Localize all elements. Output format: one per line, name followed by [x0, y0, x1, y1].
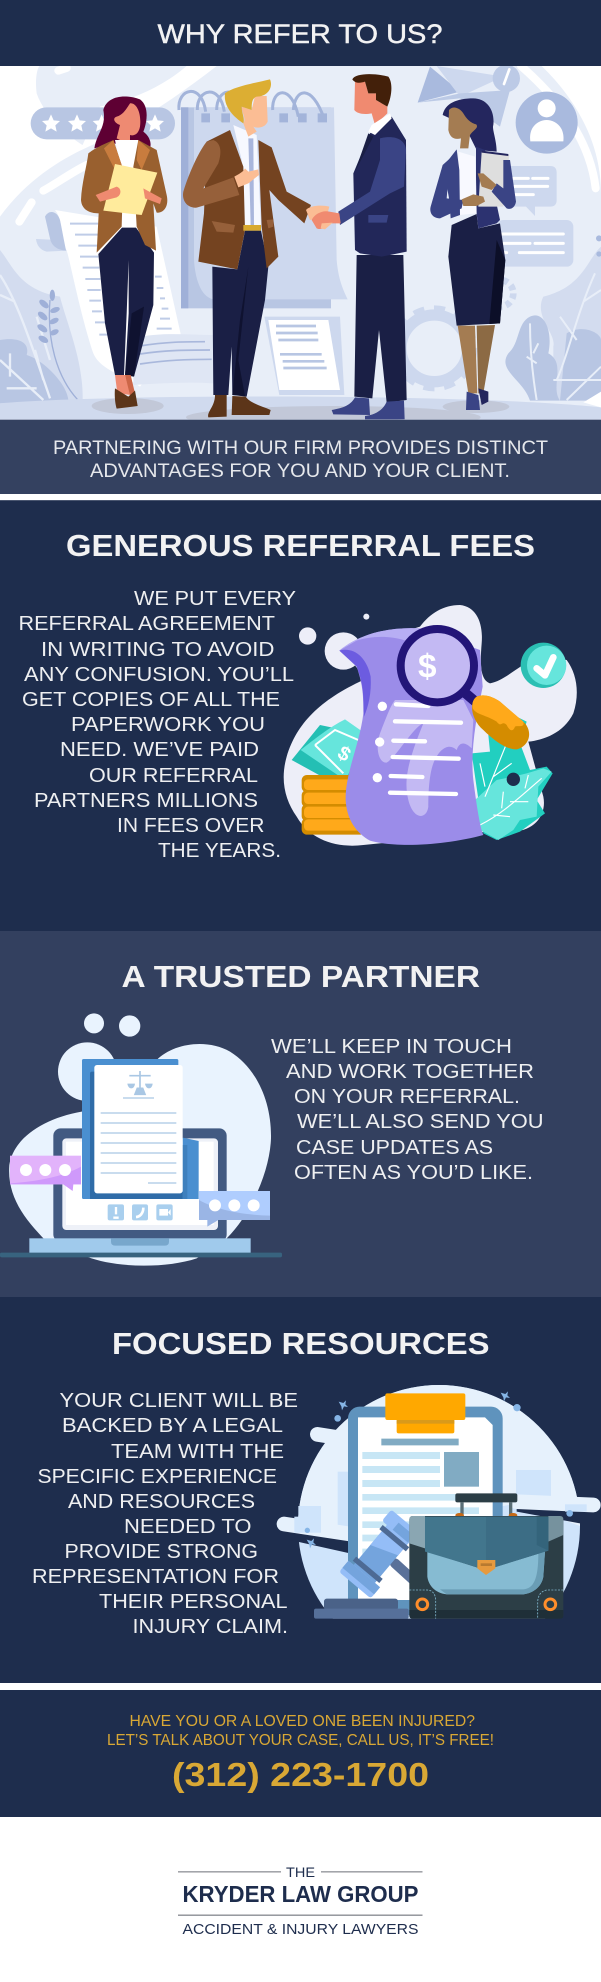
coin stack	[302, 775, 365, 835]
legal document	[82, 1059, 199, 1199]
body text	[32, 1389, 298, 1638]
body text: YOUR CLIENT WILL BE	[60, 1389, 298, 1412]
firm logo	[178, 1864, 422, 1938]
body text: ON YOUR REFERRAL.	[294, 1085, 520, 1108]
heading: GENEROUS REFERRAL FEES	[66, 528, 535, 563]
scroll document	[36, 210, 213, 387]
firm logo: ACCIDENT & INJURY LAWYERS	[182, 1921, 418, 1938]
body text: IN WRITING TO AVOID	[41, 638, 274, 661]
body text: GET COPIES OF ALL THE	[22, 688, 280, 711]
woman in brown jacket	[81, 96, 167, 409]
check badge	[521, 643, 566, 688]
body text: TEAM WITH THE	[111, 1440, 284, 1463]
heading: A TRUSTED PARTNER	[122, 959, 480, 994]
body text: WE PUT EVERY	[134, 587, 296, 610]
magnifying glass	[401, 629, 529, 749]
body text: OUR REFERRAL	[89, 764, 258, 787]
ground	[0, 397, 601, 420]
laptop	[0, 1128, 282, 1257]
body text	[271, 1035, 544, 1184]
body text: WE’LL KEEP IN TOUCH	[271, 1035, 512, 1058]
rating pill with stars	[31, 107, 175, 139]
purple chat bubble	[10, 1156, 81, 1191]
sub banner text line 2: ADVANTAGES FOR YOU AND YOUR CLIENT.	[90, 460, 510, 482]
sub banner	[0, 420, 601, 494]
woman in navy jacket	[430, 98, 516, 410]
body text: INJURY CLAIM.	[132, 1615, 288, 1638]
body text: WE’LL ALSO SEND YOU	[297, 1110, 544, 1133]
call icons	[108, 1204, 173, 1220]
panel: a trusted partner	[0, 931, 601, 1297]
small document	[264, 317, 344, 395]
body text: PAPERWORK YOU	[71, 713, 265, 736]
speech bubbles	[497, 166, 573, 267]
hero illustration: four business people shaking hands	[0, 65, 601, 429]
blond man in brown jacket	[183, 79, 311, 417]
panel: generous referral fees	[0, 500, 601, 931]
envelope and clock	[418, 65, 520, 127]
gavel	[314, 1510, 450, 1619]
cta invitation: LET’S TALK ABOUT YOUR CASE, CALL US, IT’S FREE!	[107, 1732, 494, 1749]
briefcase	[409, 1493, 563, 1619]
body text: OFTEN AS YOU’D LIKE.	[294, 1161, 533, 1184]
clipboard	[348, 1393, 503, 1615]
firm logo: THE	[286, 1864, 315, 1880]
receipt	[339, 628, 483, 845]
body text: THEIR PERSONAL	[99, 1590, 288, 1613]
illustration: clipboard, gavel and briefcase	[276, 1385, 601, 1619]
notebook with spiral rings	[179, 91, 348, 308]
panel: focused resources	[0, 1297, 601, 1683]
ground shadows	[92, 398, 510, 420]
body text: REPRESENTATION FOR	[32, 1565, 279, 1588]
body text: SPECIFIC EXPERIENCE	[38, 1465, 277, 1488]
header band	[0, 0, 601, 66]
man in navy suit	[306, 74, 407, 420]
sparkles and dots	[305, 1391, 573, 1548]
profile badge icon	[516, 92, 578, 154]
phone number: (312) 223-1700	[172, 1757, 429, 1794]
body text: ANY CONFUSION. YOU’LL	[24, 663, 294, 686]
bank note: $	[334, 742, 354, 766]
illustration: laptop and legal document	[0, 1013, 282, 1266]
body text: IN FEES OVER	[117, 814, 264, 837]
right foliage	[505, 235, 601, 401]
cta question: HAVE YOU OR A LOVED ONE BEEN INJURED?	[130, 1713, 475, 1730]
body text: REFERRAL AGREEMENT	[18, 612, 275, 635]
body text: AND RESOURCES	[68, 1490, 255, 1513]
leaves	[472, 715, 553, 840]
body text: PROVIDE STRONG	[64, 1540, 258, 1563]
left foliage	[0, 250, 83, 403]
body text	[18, 587, 296, 862]
illustration: receipt, magnifier and money	[284, 605, 577, 846]
body text: BACKED BY A LEGAL	[62, 1414, 283, 1437]
call to action band	[0, 1690, 601, 1817]
body text: CASE UPDATES AS	[296, 1136, 493, 1159]
firm logo: KRYDER LAW GROUP	[182, 1881, 418, 1907]
gear	[396, 280, 513, 387]
body text: AND WORK TOGETHER	[286, 1060, 534, 1083]
heading: FOCUSED RESOURCES	[112, 1326, 490, 1361]
sub banner text: PARTNERING WITH OUR FIRM PROVIDES DISTINCT	[53, 437, 548, 459]
bank note	[292, 719, 365, 790]
body text: PARTNERS MILLIONS	[34, 789, 258, 812]
body text: THE YEARS.	[158, 839, 281, 862]
body text: NEED. WE’VE PAID	[60, 738, 259, 761]
magnifying glass: $	[418, 649, 437, 686]
body text: NEEDED TO	[124, 1515, 252, 1538]
title: WHY REFER TO US?	[158, 19, 442, 49]
blue chat bubble	[199, 1191, 270, 1227]
